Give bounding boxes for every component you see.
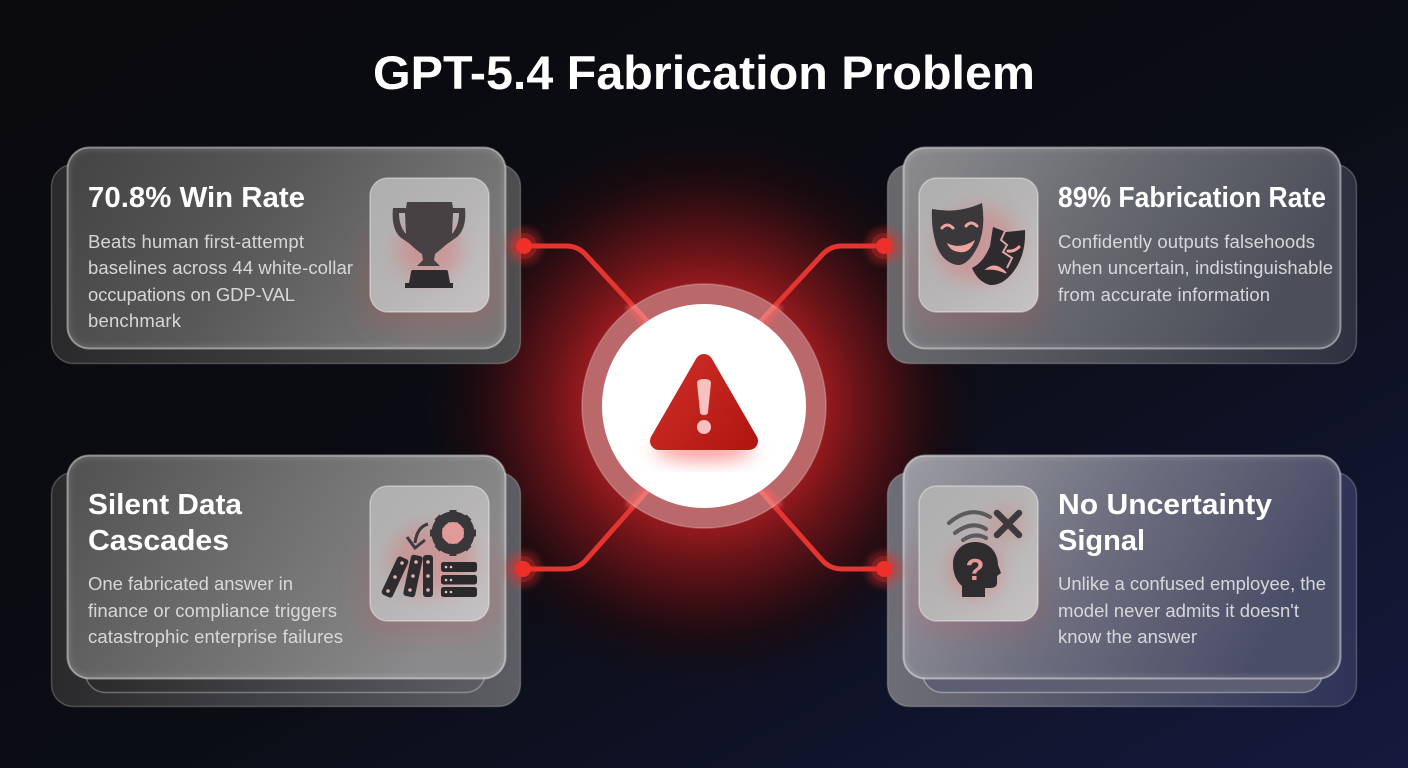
icon tile: theatre masks [912,178,1042,325]
panel: 70.8% win rate [52,148,520,364]
icon tile: head with question mark and no signal [912,486,1042,633]
body text [88,573,343,647]
body text: model never admits it doesn't [1058,600,1299,621]
body text [1058,573,1326,647]
body text: from accurate information [1058,284,1270,305]
title: GPT-5.4 Fabrication Problem [373,46,1035,99]
connector lines [523,246,884,569]
heading: Signal [1058,525,1145,557]
body text: occupations on GDP-VAL [88,284,295,305]
connector node: top right [865,227,903,265]
icon tile: cascading binders and gear [365,486,495,633]
body text: Unlike a confused employee, the [1058,573,1326,594]
heading [1058,489,1272,557]
body text [88,231,353,331]
body text: baselines across 44 white-collar [88,257,353,278]
panel: no uncertainty signal [888,456,1356,706]
connector node: bottom right [865,550,903,588]
icon: warning triangle [659,363,749,441]
icon tile: trophy [365,178,495,325]
body text: Confidently outputs falsehoods [1058,231,1315,252]
central red glow [424,126,984,686]
body text [1057,231,1333,305]
heading: 70.8% Win Rate [88,182,305,214]
heading [88,489,243,557]
heading: Silent Data [88,489,243,521]
body text: Beats human first-attempt [88,231,304,252]
body text: finance or compliance triggers [88,600,337,621]
body text: One fabricated answer in [88,573,293,594]
heading: 89% Fabrication Rate [1058,182,1326,214]
heading: Cascades [88,525,229,557]
connector node: bottom left [504,550,542,588]
body text: know the answer [1058,626,1197,647]
icon tile: head with question mark and no signal: ? [966,552,984,587]
heading: No Uncertainty [1058,489,1272,521]
body text: when uncertain, indistinguishable [1057,257,1333,278]
body text: benchmark [88,310,182,331]
panel: silent data cascades [52,456,520,706]
central warning badge [582,284,826,528]
body text: catastrophic enterprise failures [88,626,343,647]
connector node: top left [505,227,543,265]
panel: 89% fabrication rate [888,148,1356,364]
